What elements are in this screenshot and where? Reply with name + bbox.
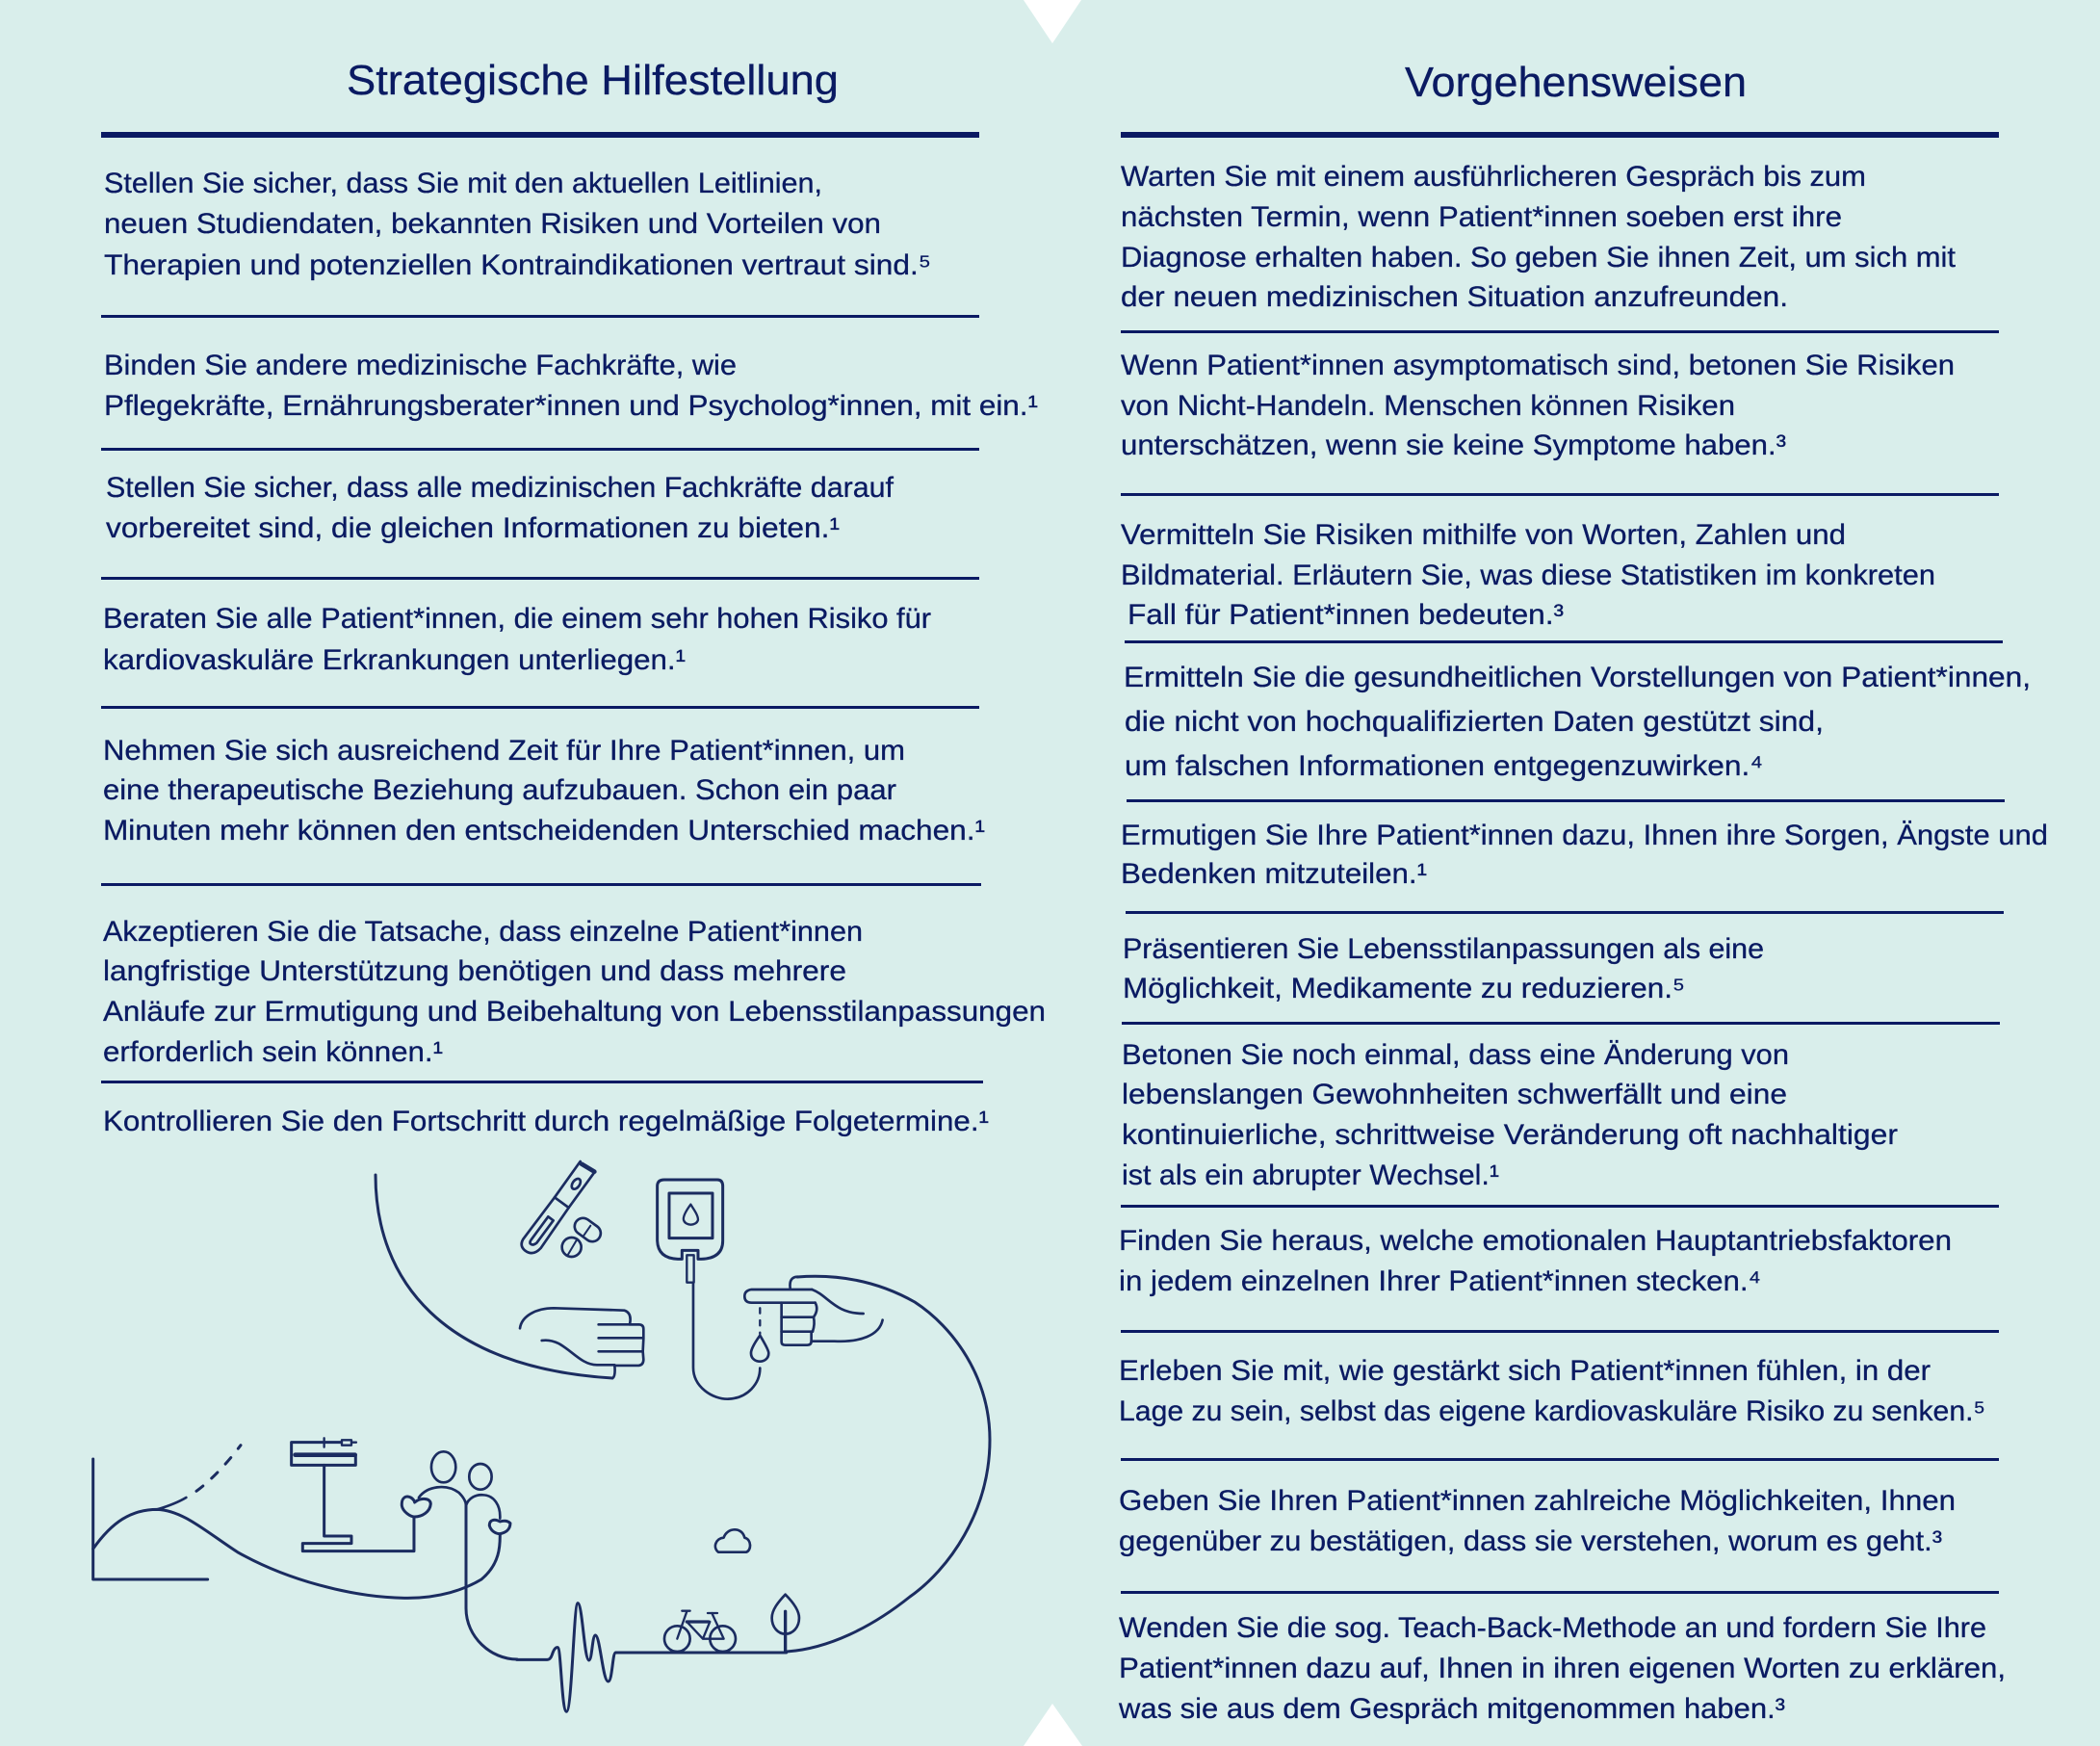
text block: Verständnis bestätigen: gegenüber zu bestätigen, dass sie verstehen, worum es geht.³	[1119, 1525, 1942, 1557]
text block: Fachkräfte einbinden: Pflegekräfte, Ernährungsberater*innen und Psycholog*innen, mit ein.¹	[104, 390, 1038, 422]
text block: asymptomatische Patienten: Wenn Patient*innen asymptomatisch sind, betonen Sie Risiken	[1121, 350, 1955, 381]
text block: Leitlinien	[104, 168, 931, 281]
text block: Gespräch verschieben: Diagnose erhalten haben. So geben Sie ihnen Zeit, um sich mit	[1121, 242, 1957, 274]
text block: alle Patienten beraten: kardiovaskuläre Erkrankungen unterliegen.¹	[103, 644, 686, 676]
text block: Sorgen mitteilen	[1121, 820, 2048, 890]
text block: ausreichend Zeit: Minuten mehr können den entscheidenden Unterschied machen.¹	[103, 815, 985, 847]
text block: gleiche Informationen: vorbereitet sind, die gleichen Informationen zu bieten.¹	[106, 512, 840, 544]
text block: asymptomatische Patienten: von Nicht-Handeln. Menschen können Risiken	[1121, 390, 1735, 422]
text block: langfristige Unterstützung	[103, 916, 1046, 1068]
text block: gestärkt fühlen	[1119, 1355, 1985, 1427]
text block: gesundheitliche Vorstellungen	[1124, 662, 2031, 782]
text block: Teach-Back-Methode: Patient*innen dazu auf, Ihnen in ihren eigenen Worten zu erklären,	[1119, 1653, 2006, 1684]
text block: Gespräch verschieben	[1121, 161, 1957, 313]
text block: Gewohnheiten: lebenslangen Gewohnheiten schwerfällt und eine	[1122, 1079, 1787, 1110]
text block: gestärkt fühlen: Lage zu sein, selbst das eigene kardiovaskuläre Risiko zu senken.⁵	[1119, 1395, 1985, 1427]
text block: Sorgen mitteilen: Bedenken mitzuteilen.¹	[1121, 858, 1427, 890]
text block: Gespräch verschieben: der neuen medizinischen Situation anzufreunden.	[1121, 281, 1788, 313]
text block: gestärkt fühlen: Erleben Sie mit, wie gestärkt sich Patient*innen fühlen, in der	[1119, 1355, 1931, 1387]
text block: Gewohnheiten: ist als ein abrupter Wechsel.¹	[1122, 1160, 1499, 1191]
icon: injector stand	[292, 1438, 414, 1551]
text block: ausreichend Zeit: Nehmen Sie sich ausreichend Zeit für Ihre Patient*innen, um	[103, 735, 905, 767]
text block: Gewohnheiten: Betonen Sie noch einmal, dass eine Änderung von	[1122, 1039, 1789, 1071]
text block: gleiche Informationen: Stellen Sie sicher, dass alle medizinischen Fachkräfte darauf	[106, 472, 894, 504]
text block: Hauptantriebsfaktoren: in jedem einzelnen Ihrer Patient*innen stecken.⁴	[1119, 1265, 1761, 1297]
text block: Gespräch verschieben: nächsten Termin, wenn Patient*innen soeben erst ihre	[1121, 201, 1842, 233]
text block: langfristige Unterstützung: langfristige Unterstützung benötigen und dass mehrere	[103, 955, 846, 987]
text block: Hauptantriebsfaktoren	[1119, 1225, 1952, 1297]
text block: asymptomatische Patienten	[1121, 350, 1955, 461]
icon: two people with hearts	[402, 1451, 510, 1534]
text block: alle Patienten beraten	[103, 603, 931, 676]
text block: ausreichend Zeit	[103, 735, 985, 847]
text block: Teach-Back-Methode: Wenden Sie die sog. Teach-Back-Methode an und fordern Sie Ihre	[1119, 1612, 1986, 1644]
text block: gesundheitliche Vorstellungen: um falschen Informationen entgegenzuwirken.⁴	[1125, 750, 1763, 782]
text block: Risiken vermitteln	[1121, 519, 1935, 631]
icon: cloud	[715, 1529, 750, 1552]
text block: Fachkräfte einbinden: Binden Sie andere medizinische Fachkräfte, wie	[104, 350, 737, 381]
text block: Lebensstilanpassungen: Möglichkeit, Medikamente zu reduzieren.⁵	[1123, 973, 1685, 1004]
text block: Verständnis bestätigen	[1119, 1485, 1956, 1557]
text block: Gewohnheiten: kontinuierliche, schrittweise Veränderung oft nachhaltiger	[1122, 1119, 1898, 1151]
text block: gesundheitliche Vorstellungen: die nicht von hochqualifizierten Daten gestützt sind,	[1125, 706, 1824, 738]
icon: tree	[772, 1595, 799, 1652]
text block: langfristige Unterstützung: Akzeptieren Sie die Tatsache, dass einzelne Patient*innen	[103, 916, 863, 948]
text block: Verständnis bestätigen: Geben Sie Ihren Patient*innen zahlreiche Möglichkeiten, Ihnen	[1119, 1485, 1956, 1517]
heading: Vorgehensweisen: Vorgehensweisen	[1405, 59, 1747, 106]
heartbeat line	[466, 1502, 787, 1711]
text block: Lebensstilanpassungen	[1123, 933, 1764, 1004]
illustration: patient journey line drawing	[93, 1161, 990, 1711]
text block: Risiken vermitteln: Fall für Patient*innen bedeuten.³	[1128, 599, 1564, 631]
text block: Risiken vermitteln: Bildmaterial. Erläutern Sie, was diese Statistiken im konkreten	[1121, 560, 1935, 591]
text block: Lebensstilanpassungen: Präsentieren Sie Lebensstilanpassungen als eine	[1123, 933, 1764, 965]
icon: bicycle	[664, 1611, 736, 1652]
heading: Strategische Hilfestellung: Strategische Hilfestellung	[347, 57, 839, 104]
chart: curve with axes	[93, 1446, 500, 1598]
text block: Sorgen mitteilen: Ermutigen Sie Ihre Patient*innen dazu, Ihnen ihre Sorgen, Ängste und	[1121, 820, 2048, 851]
text block: alle Patienten beraten: Beraten Sie alle Patient*innen, die einem sehr hohen Risiko für	[103, 603, 931, 635]
text block: Gewohnheiten	[1122, 1039, 1898, 1191]
text block: Gespräch verschieben: Warten Sie mit einem ausführlicheren Gespräch bis zum	[1121, 161, 1866, 193]
icon: blood glucose meter with cable	[658, 1180, 760, 1399]
text block: gesundheitliche Vorstellungen: Ermitteln Sie die gesundheitlichen Vorstellungen von Patient*innen,	[1124, 662, 2031, 693]
text block: Teach-Back-Methode	[1118, 1612, 2006, 1725]
text block: gleiche Informationen	[106, 472, 894, 544]
icon: pen injector and pills	[522, 1161, 604, 1257]
text block: Fachkräfte einbinden	[104, 350, 1038, 422]
text block: Hauptantriebsfaktoren: Finden Sie heraus, welche emotionalen Hauptantriebsfaktoren	[1119, 1225, 1952, 1257]
text block: Risiken vermitteln: Vermitteln Sie Risiken mithilfe von Worten, Zahlen und	[1121, 519, 1846, 551]
text block: langfristige Unterstützung: erforderlich sein können.¹	[103, 1036, 443, 1068]
icon: right hand with blood drop	[744, 1277, 883, 1362]
text block: asymptomatische Patienten: unterschätzen, wenn sie keine Symptome haben.³	[1121, 430, 1786, 461]
main journey line	[376, 1175, 990, 1652]
text block: Leitlinien: neuen Studiendaten, bekannten Risiken und Vorteilen von	[104, 208, 881, 240]
panel: Vorgehensweisen	[1118, 59, 2048, 1725]
icon: left hand	[520, 1308, 643, 1378]
text block: ausreichend Zeit: eine therapeutische Beziehung aufzubauen. Schon ein paar	[103, 774, 896, 806]
text block: Leitlinien: Therapien und potenziellen Kontraindikationen vertraut sind.⁵	[104, 249, 931, 281]
text block: Teach-Back-Methode: was sie aus dem Gespräch mitgenommen haben.³	[1118, 1693, 1785, 1725]
text block: Folgetermine: Kontrollieren Sie den Fortschritt durch regelmäßige Folgetermine.¹	[103, 1106, 989, 1137]
panel: Strategische Hilfestellung	[101, 57, 1046, 1137]
text block: langfristige Unterstützung: Anläufe zur Ermutigung und Beibehaltung von Lebensstilanpassungen	[103, 996, 1046, 1028]
text block: Leitlinien: Stellen Sie sicher, dass Sie mit den aktuellen Leitlinien,	[104, 168, 822, 199]
